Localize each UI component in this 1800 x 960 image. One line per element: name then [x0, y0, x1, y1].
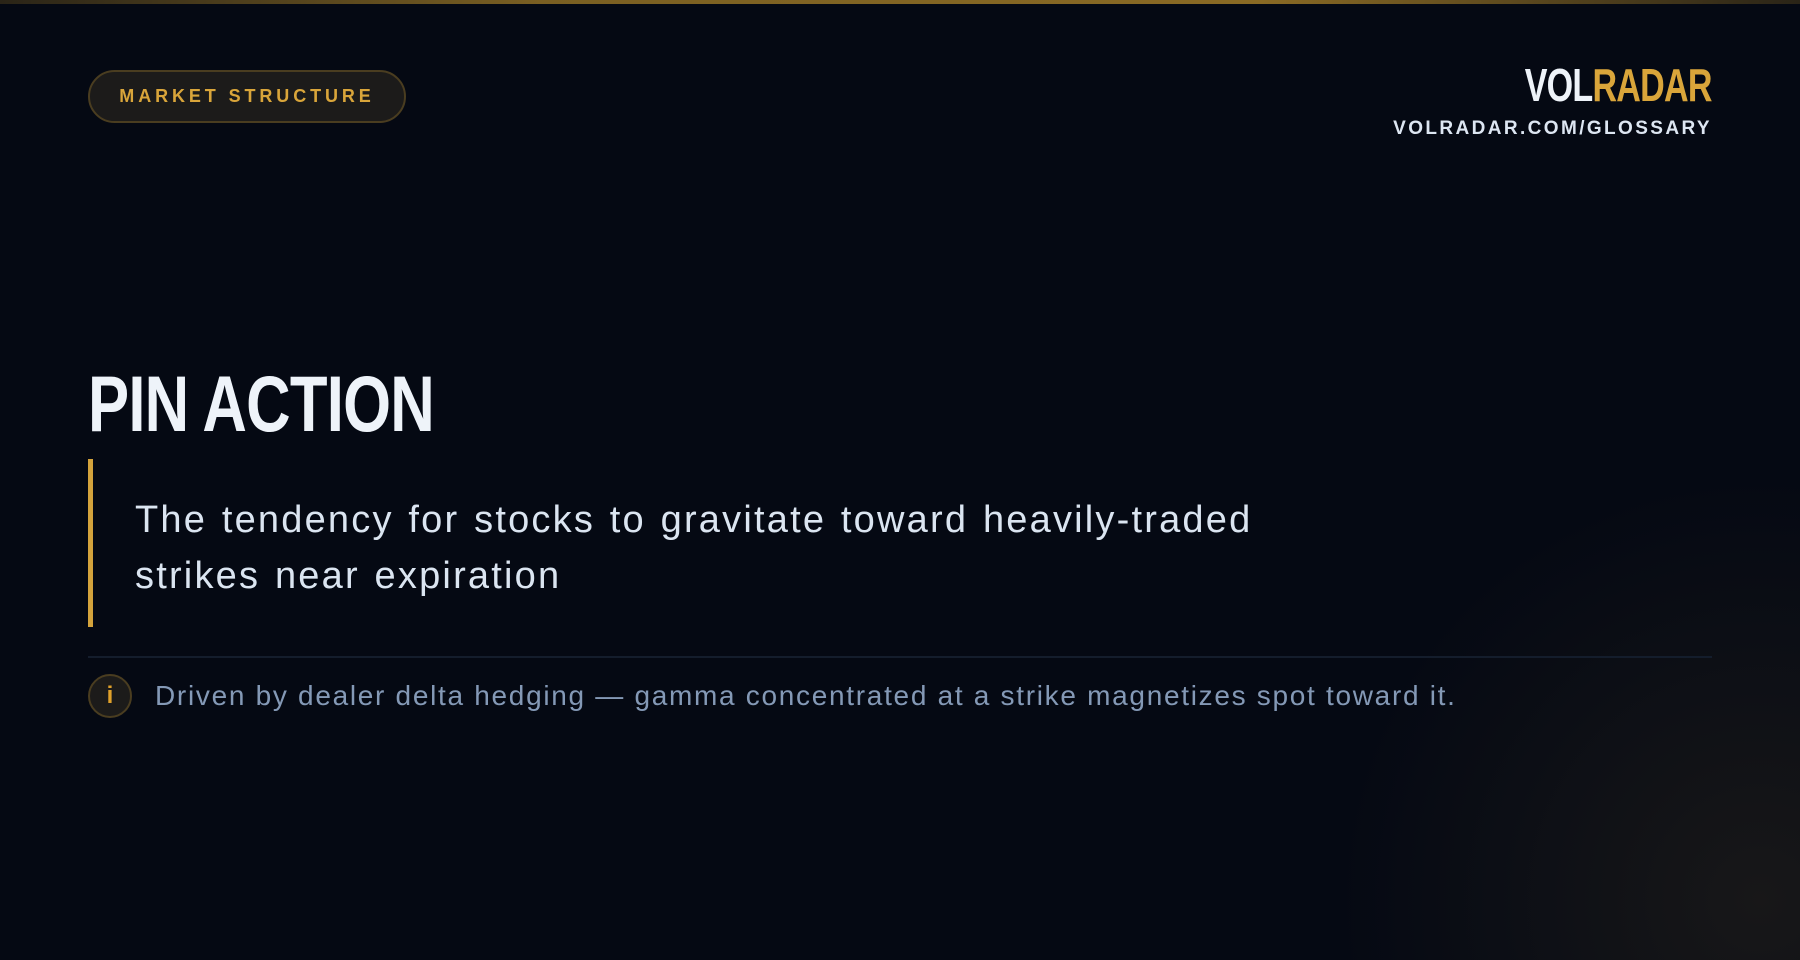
title: PIN ACTION [88, 359, 434, 448]
category pill: MARKET STRUCTURE [119, 86, 375, 106]
definition quote [88, 459, 1488, 627]
note row [88, 674, 1457, 718]
icon: info: i [107, 682, 113, 709]
definition quote: strikes near expiration [135, 555, 561, 597]
category pill [88, 70, 406, 123]
brand name: VOLRADAR [1525, 59, 1712, 111]
logo block [1393, 59, 1712, 139]
url: VOLRADAR.COM/GLOSSARY [1393, 118, 1712, 139]
note text: Driven by dealer delta hedging — gamma concentrated at a strike magnetizes spot toward it. [155, 680, 1457, 711]
icon: info [88, 674, 132, 718]
definition quote: The tendency for stocks to gravitate toward heavily-traded [135, 499, 1252, 541]
